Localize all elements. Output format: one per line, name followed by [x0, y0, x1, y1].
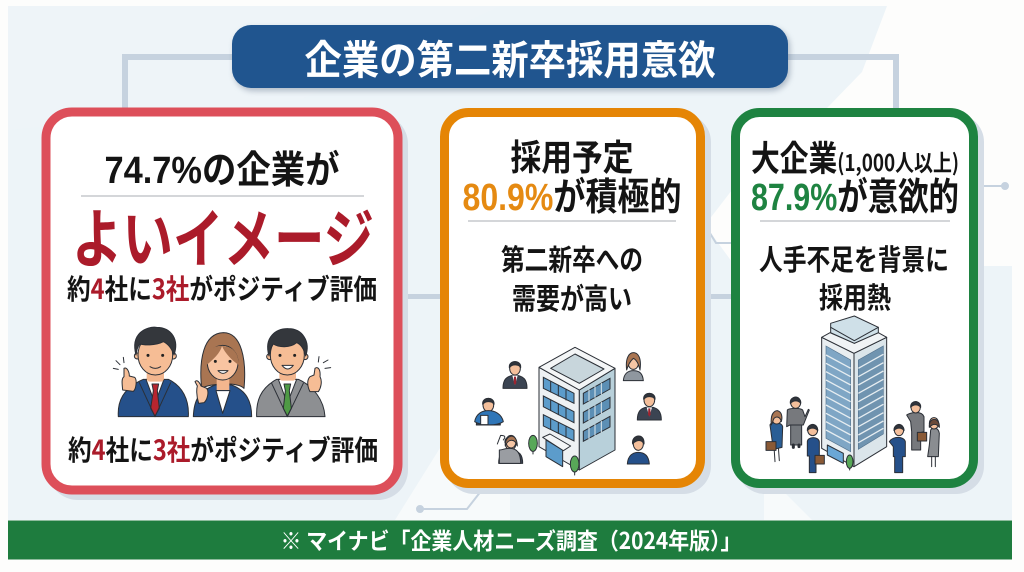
text: about 3 of 4 companies positive (repeat): 約4社に3社がポジティブ評価: [68, 429, 378, 469]
trees: [529, 435, 579, 475]
text: labor shortage drives hiring: 人手不足を背景に: [759, 237, 949, 279]
office building: [539, 347, 615, 470]
footer source bar: ※ マイナビ「企業人材ニーズ調査（2024年版）」: [280, 522, 742, 556]
illustration: tower with business people: [766, 316, 939, 473]
footer source bar: [8, 520, 1012, 560]
text: high demand for second-new-graduates: [501, 237, 643, 318]
panel: good image (74.7%): [46, 112, 408, 500]
people on right: [889, 402, 939, 473]
text: high demand for second-new-graduates: 第二新卒への: [501, 237, 643, 279]
tower building: [822, 316, 887, 470]
text: about 3 of 4 companies positive: 約4社に3社がポジティブ評価: [67, 268, 377, 308]
heading: hiring plans: 採用予定: [510, 129, 634, 181]
man in navy suit, red tie: [113, 327, 188, 417]
people on left: [766, 397, 824, 473]
text: labor shortage drives hiring: 採用熱: [819, 275, 891, 317]
illustration: office building with people: [475, 347, 661, 475]
title banner: 企業の第二新卒採用意欲: [304, 28, 716, 86]
woman in navy suit: [193, 333, 252, 417]
stat: 80.9% active: 80.9%が積極的: [462, 177, 682, 219]
panel: large companies (87.9%): [736, 112, 984, 494]
big red text: good image: よいイメージ: [72, 189, 374, 281]
business people around building: [475, 353, 661, 464]
panel: hiring plans (80.9%): [444, 112, 711, 494]
text: labor shortage drives hiring: [759, 237, 949, 317]
man in grey suit, green tie: [257, 329, 331, 417]
connector lines: [125, 57, 1008, 512]
text: high demand for second-new-graduates: 需要が高い: [512, 276, 632, 318]
heading: 74.7% of companies: 74.7%の企業が: [104, 150, 340, 192]
heading: large companies (1,000+ employees): 大企業(1,000人以上): [751, 131, 959, 182]
illustration: three business people giving thumbs up: [113, 327, 331, 417]
stat: 87.9% motivated: 87.9%が意欲的: [751, 177, 959, 219]
